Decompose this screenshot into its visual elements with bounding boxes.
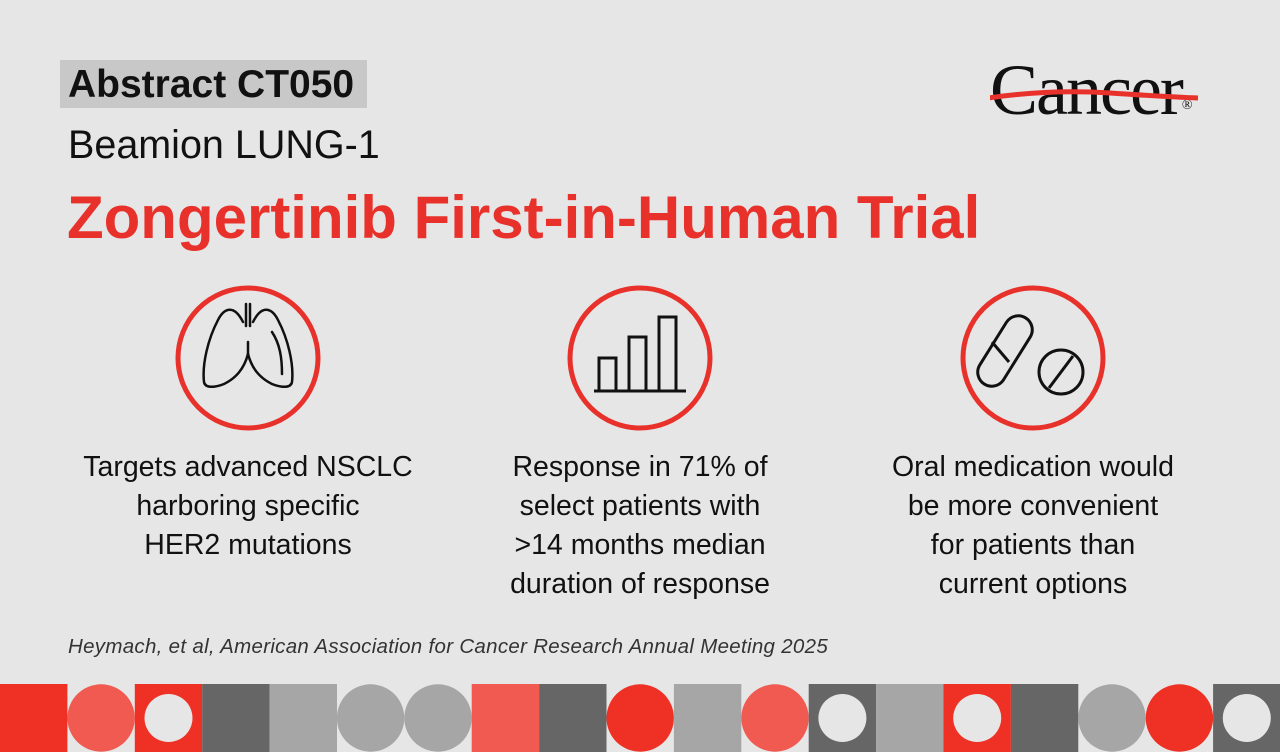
- text: column 2: select patients with: [520, 490, 760, 522]
- text: column 3: Oral medication would: [892, 451, 1174, 483]
- text: column 3: for patients than: [931, 529, 1135, 561]
- text: column 2: >14 months median: [514, 529, 766, 561]
- text: column 1: HER2 mutations: [144, 529, 352, 561]
- subtitle: Beamion LUNG-1: [68, 123, 380, 167]
- title: Zongertinib First-in-Human Trial: [67, 184, 980, 251]
- icon: lungs: [176, 286, 320, 430]
- decorative pattern strip: [0, 684, 1280, 752]
- text: column 2: [510, 451, 770, 600]
- text: column 3: [892, 451, 1174, 600]
- abstract label: Abstract CT050: [68, 63, 354, 106]
- text: column 2: Response in 71% of: [512, 451, 768, 483]
- text: column 1: harboring specific: [136, 490, 360, 522]
- icon: bar chart: [568, 286, 712, 430]
- logo: Cancer®: [990, 50, 1193, 130]
- citation: Heymach, et al, American Association for Cancer Research Annual Meeting 2025: [68, 635, 828, 658]
- text: column 1: Targets advanced NSCLC: [83, 451, 413, 483]
- icon: pills: [960, 286, 1106, 430]
- text: column 3: current options: [939, 568, 1127, 600]
- text: column 1: [83, 451, 413, 561]
- text: column 2: duration of response: [510, 568, 770, 600]
- text: column 3: be more convenient: [908, 490, 1158, 522]
